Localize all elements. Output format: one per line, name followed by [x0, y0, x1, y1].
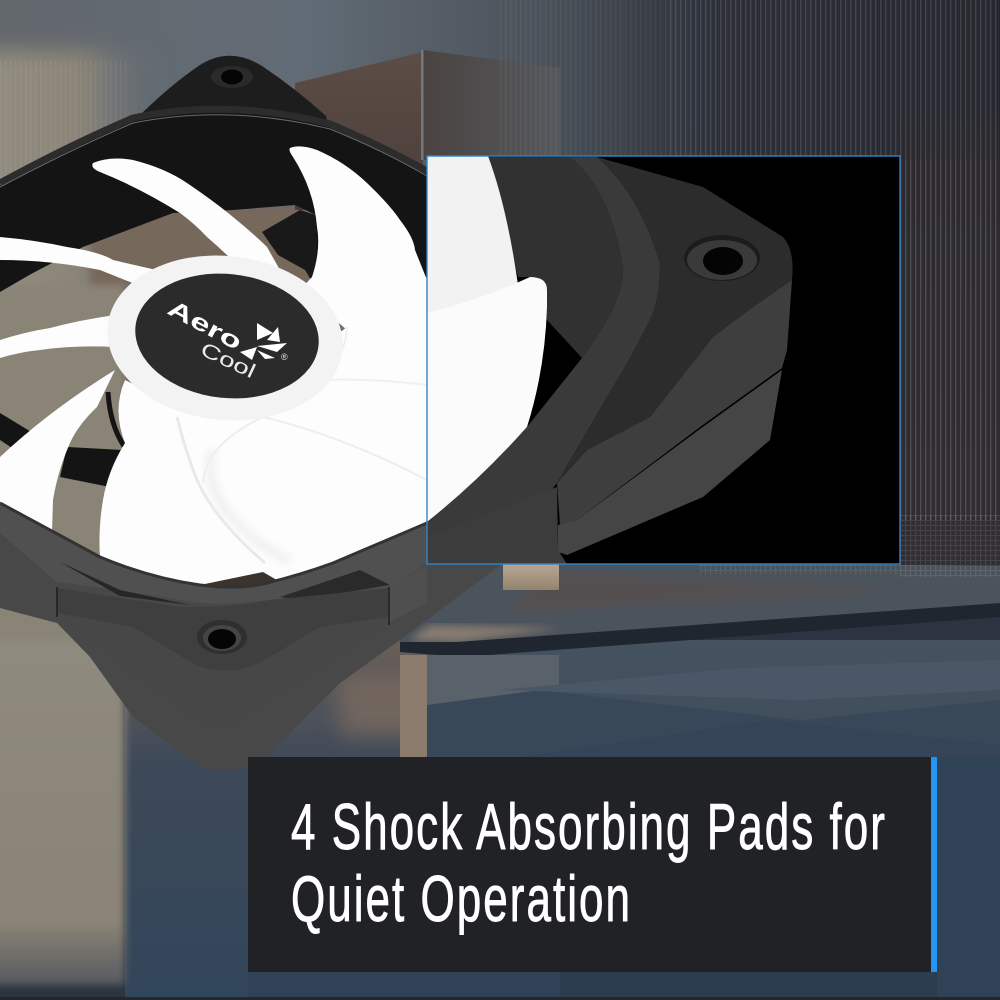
lower frame with corner pad	[0, 503, 503, 770]
caption heading: Quiet Operation	[291, 862, 632, 935]
blade A	[92, 159, 280, 270]
inset: pad upper side	[557, 280, 792, 525]
floor slab	[400, 560, 1000, 642]
dark gap at blade tips	[200, 572, 282, 590]
frame silhouette	[0, 503, 503, 770]
vertical stripe overlay	[500, 0, 670, 160]
lower mount hole	[197, 620, 247, 654]
blade G	[175, 277, 427, 584]
inset: lower blade	[427, 277, 547, 522]
floor	[125, 640, 1000, 1000]
caption heading	[291, 790, 887, 935]
inset: lower frame	[494, 487, 566, 564]
top mount hole	[211, 66, 253, 88]
inset: pad lower side	[558, 370, 782, 555]
pad top face	[57, 588, 388, 671]
hub with AeroCool logo: Cool	[197, 339, 259, 383]
top rim	[0, 109, 427, 183]
inset: upper blade	[427, 156, 518, 325]
blade B	[289, 146, 427, 330]
blade C	[0, 237, 165, 290]
inset: frame shroud	[488, 157, 623, 358]
hub with AeroCool logo: ®	[281, 352, 288, 362]
hub with AeroCool logo	[99, 244, 351, 432]
frame shadow gap	[60, 562, 190, 605]
caption panel	[248, 757, 937, 972]
blade F	[99, 380, 290, 590]
inner rim	[0, 503, 427, 604]
shroud strut	[262, 210, 316, 288]
cables	[0, 413, 33, 450]
blade D	[0, 315, 115, 358]
zoom inset panel	[427, 156, 900, 564]
pad side faces	[57, 613, 388, 727]
fan body	[0, 56, 427, 487]
fan blades	[0, 146, 427, 590]
top mounting pad	[135, 56, 330, 135]
blade E	[0, 370, 115, 532]
frame seam	[57, 587, 389, 625]
blade shading	[203, 417, 427, 483]
black shroud interior	[0, 109, 427, 300]
inset: rim band	[427, 157, 660, 564]
floor reflections	[400, 655, 427, 760]
pillar	[295, 52, 423, 210]
accent bar	[931, 757, 937, 972]
inset: mounting hole	[684, 235, 760, 281]
logo star icon	[240, 323, 287, 360]
inset: pad top face	[557, 157, 793, 483]
hub cable ring	[108, 392, 124, 446]
logo wordmark: Aero	[164, 294, 246, 355]
